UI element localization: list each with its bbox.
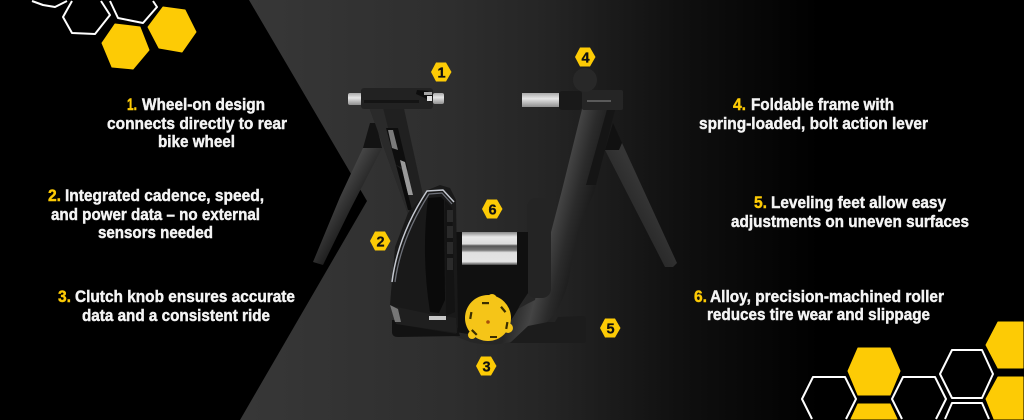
text: feature 3: data and a consistent ride xyxy=(82,306,270,325)
leveling foot xyxy=(510,316,586,343)
badge 4 xyxy=(575,48,596,66)
text: feature 1 xyxy=(107,95,287,151)
badge 3 xyxy=(476,356,496,376)
right axle xyxy=(522,68,623,110)
badge 4: 4 xyxy=(581,50,590,66)
text: feature 2: Integrated cadence, speed, xyxy=(65,186,264,205)
text: feature 1: 1. xyxy=(127,95,137,114)
text: feature 4: Foldable frame with xyxy=(751,95,894,114)
base foot left xyxy=(392,320,460,337)
badge 1: 1 xyxy=(437,66,446,82)
right side disc xyxy=(527,198,551,298)
outline hexagons xyxy=(32,1,157,34)
badge 2: 2 xyxy=(376,234,385,250)
text: feature 5: 5. xyxy=(754,193,767,212)
left rear leg xyxy=(313,123,382,265)
text: feature 1: connects directly to rear xyxy=(107,114,287,133)
yellow hexagons xyxy=(102,7,196,69)
text: feature 3: 3. xyxy=(58,287,71,306)
left axle xyxy=(348,88,444,109)
text: feature 4: 4. xyxy=(733,95,746,114)
decorative hexagons: bottom right xyxy=(802,322,1023,419)
badge 6 xyxy=(482,200,502,218)
trainer illustration xyxy=(313,68,677,344)
text: feature 6: Alloy, precision-machined roller xyxy=(710,287,944,306)
lower band of shield xyxy=(392,306,457,333)
badge 3: 3 xyxy=(482,360,491,376)
label plate xyxy=(429,316,446,320)
icon: yellow clutch knob xyxy=(465,294,513,341)
text: feature 2: 2. xyxy=(48,186,61,205)
yellow hexagons xyxy=(848,322,1023,419)
roller xyxy=(462,232,517,265)
text: feature 4: spring-loaded, bolt action lever xyxy=(699,114,928,133)
decorative hexagons: top left xyxy=(32,1,196,69)
text: feature 6 xyxy=(694,287,944,324)
text: feature 3 xyxy=(58,287,295,325)
left upright tube xyxy=(368,104,423,225)
outline hexagons xyxy=(802,350,993,419)
badge 2 xyxy=(370,232,390,250)
text: feature 6: reduces tire wear and slippage xyxy=(707,305,930,324)
badge 5 xyxy=(600,318,620,338)
badge 5: 5 xyxy=(606,322,615,338)
panel: left black chevron xyxy=(0,0,367,420)
flywheel inner face xyxy=(425,197,445,313)
text: feature 3: Clutch knob ensures accurate xyxy=(75,287,295,306)
text: feature 1: bike wheel xyxy=(158,132,235,151)
silver trim xyxy=(392,190,454,282)
text: feature 5: Leveling feet allow easy xyxy=(771,193,946,212)
flywheel shield xyxy=(390,185,458,334)
text: feature 6: 6. xyxy=(694,287,707,306)
badge 6: 6 xyxy=(488,202,497,218)
text: feature 2: sensors needed xyxy=(98,223,213,242)
text: feature 5: adjustments on uneven surfaces xyxy=(731,212,969,231)
right rear leg xyxy=(605,123,677,267)
text: feature 2 xyxy=(48,186,264,242)
text: feature 2: and power data – no external xyxy=(51,205,260,224)
text: feature 4 xyxy=(699,95,928,133)
right upright tube and base curve xyxy=(447,105,616,344)
text: feature 1: Wheel-on design xyxy=(142,95,265,114)
text: feature 5 xyxy=(731,193,969,231)
badge 1 xyxy=(431,62,452,82)
central resistance block xyxy=(455,232,528,338)
